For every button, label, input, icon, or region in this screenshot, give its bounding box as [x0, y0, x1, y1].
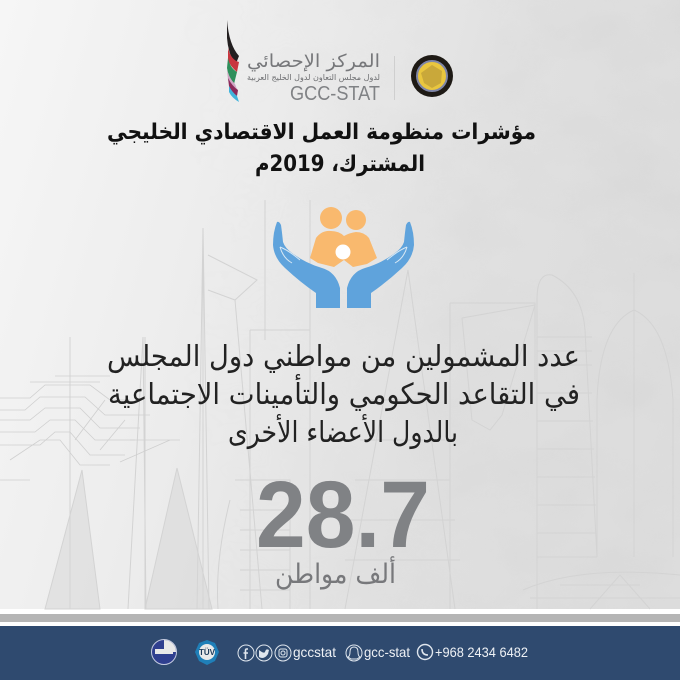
logo ribbon [227, 20, 239, 102]
unit label: ألف مواطن [275, 556, 396, 590]
icon: TUV badge: TÜV [199, 648, 216, 657]
icon: certification badge [152, 640, 176, 664]
description text: بالدول الأعضاء الأخرى [228, 414, 458, 450]
logo arabic name: المركز الإحصائي [247, 51, 380, 72]
contact handle: gccstat [293, 644, 336, 660]
title [107, 120, 536, 177]
white center circle [336, 244, 350, 260]
title: المشترك، 2019م [255, 152, 425, 177]
contact handle: gcc-stat [364, 644, 410, 660]
left hand [273, 222, 340, 308]
gray band [0, 614, 680, 622]
logo: GCC-STAT [227, 20, 453, 105]
big number: 28.7 [256, 462, 430, 568]
family figures [310, 207, 377, 267]
footer bar [0, 626, 680, 680]
description text: في التقاعد الحكومي والتأمينات الاجتماعية [108, 374, 580, 412]
phone number: +968 2434 6482 [435, 644, 528, 660]
description text [107, 339, 580, 450]
icon: TUV badge [195, 640, 219, 665]
emblem [411, 55, 453, 97]
logo latin name: GCC-STAT [290, 82, 380, 105]
description text: عدد المشمولين من مواطني دول المجلس [107, 339, 580, 374]
skyline illustration [45, 200, 680, 609]
icon: hands holding family [273, 207, 414, 308]
title: مؤشرات منظومة العمل الاقتصادي الخليجي [107, 120, 536, 145]
logo arabic subtitle: لدول مجلس التعاون لدول الخليج العربية [247, 73, 380, 82]
social icons [238, 644, 432, 661]
circuit pattern [0, 376, 180, 480]
right hand [347, 222, 414, 308]
